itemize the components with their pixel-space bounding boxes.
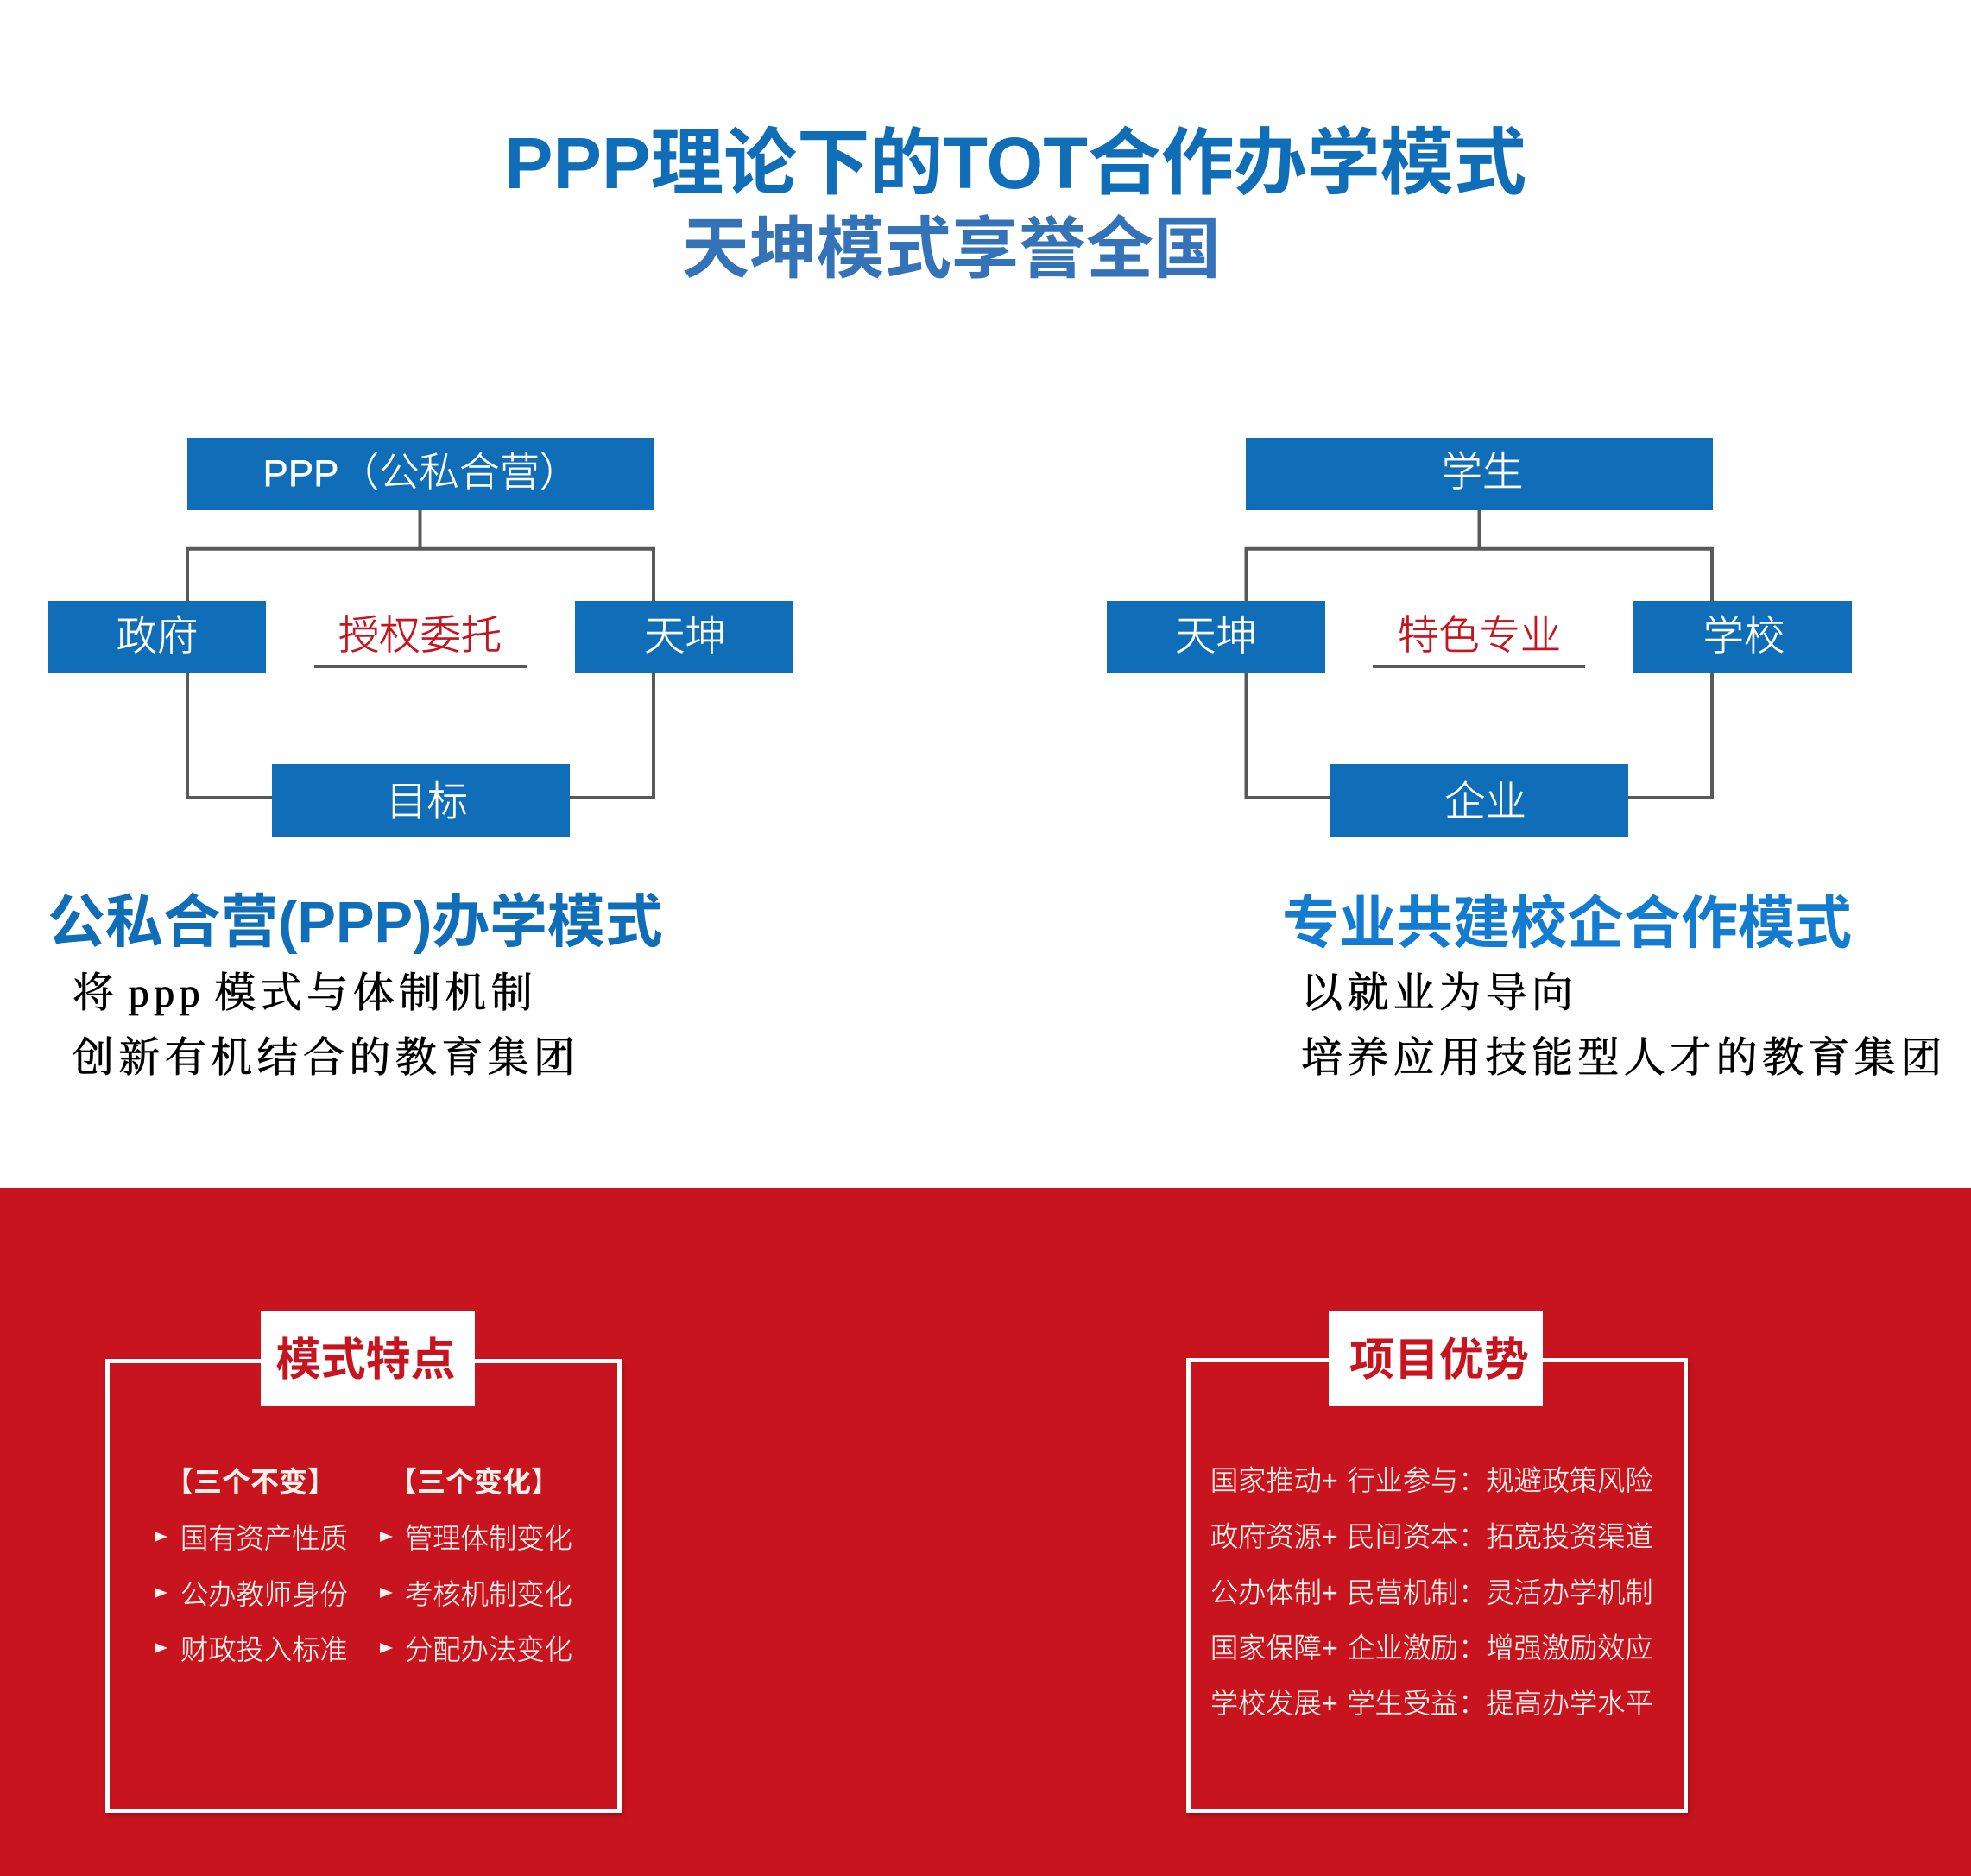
box: 天坤 — [1107, 601, 1325, 673]
bullet 2 — [155, 1588, 167, 1598]
label: 授权委托: 授权委托 — [338, 613, 502, 659]
list: changed — [380, 1523, 572, 1665]
box: 政府 — [48, 601, 266, 673]
title line 2: 天坤模式享誉全国 — [682, 211, 1221, 287]
text block: PPP model — [47, 891, 663, 1081]
tag: 项目优势 — [1329, 1311, 1543, 1406]
connector lines — [1245, 510, 1714, 799]
panel: 模式特点 — [105, 1311, 625, 1818]
box: 学生: 学生 — [1442, 450, 1523, 496]
box: 目标: 目标 — [386, 780, 468, 825]
box: 天坤 — [575, 601, 793, 673]
box: PPP — [187, 438, 654, 510]
column heading: 三个变化: 【三个变化】 — [389, 1466, 559, 1498]
bullet 1 — [155, 1532, 167, 1542]
description line 1: 将 ppp 模式与体制机制 — [73, 970, 537, 1016]
list: unchanged — [155, 1523, 348, 1665]
bullet 1 — [380, 1532, 393, 1542]
description line 2: 培养应用技能型人才的教育集团 — [1301, 1035, 1947, 1081]
connector lines — [186, 510, 655, 799]
advantage row 5: 学校发展+ 学生受益：提高办学水平 — [1210, 1688, 1653, 1719]
item 1: 国有资产性质 — [180, 1523, 348, 1554]
box: 学校: 学校 — [1703, 614, 1785, 660]
panel: red background — [0, 1188, 1971, 1876]
bullet 2 — [380, 1588, 393, 1598]
title — [504, 122, 1526, 287]
box: 天坤: 天坤 — [1175, 614, 1257, 660]
heading: 专业共建校企合作模式 — [1282, 891, 1852, 955]
tag: 模式特点: 模式特点 — [275, 1336, 456, 1386]
bullet 3 — [380, 1643, 393, 1653]
title line 1: PPP理论下的TOT合作办学模式 — [504, 122, 1526, 204]
text block: school-enterprise model — [1282, 891, 1947, 1081]
box: 企业: 企业 — [1444, 780, 1526, 825]
panel: school-enterprise diagram — [1107, 438, 1852, 837]
advantage row 4: 国家保障+ 企业激励：增强激励效应 — [1210, 1633, 1653, 1664]
underline — [1373, 665, 1585, 668]
item 1: 管理体制变化 — [405, 1523, 572, 1554]
item 3: 财政投入标准 — [180, 1634, 348, 1665]
item 3: 分配办法变化 — [405, 1634, 572, 1665]
description line 1: 以就业为导向 — [1301, 970, 1577, 1016]
box: 学生 — [1246, 438, 1713, 510]
label: 特色专业: 特色专业 — [1398, 613, 1561, 659]
item 2: 公办教师身份 — [180, 1579, 348, 1610]
advantage row 1: 国家推动+ 行业参与：规避政策风险 — [1210, 1465, 1653, 1496]
frame — [1186, 1358, 1688, 1813]
box: 企业 — [1330, 764, 1628, 837]
underline — [314, 665, 527, 668]
box: 天坤: 天坤 — [644, 614, 726, 660]
tag: 项目优势: 项目优势 — [1349, 1336, 1529, 1386]
box: PPP: PPP（公私合营） — [262, 450, 580, 495]
column heading: 三个不变: 【三个不变】 — [165, 1466, 336, 1498]
panel: 项目优势 — [1186, 1311, 1692, 1818]
panel: PPP diagram — [48, 438, 793, 837]
bullet 3 — [155, 1643, 167, 1653]
item 2: 考核机制变化 — [405, 1579, 572, 1610]
heading: 公私合营(PPP)办学模式 — [47, 891, 663, 955]
box: 学校 — [1633, 601, 1852, 673]
description line 2: 创新有机结合的教育集团 — [73, 1035, 579, 1081]
advantage row 3: 公办体制+ 民营机制：灵活办学机制 — [1210, 1577, 1653, 1608]
box: 目标 — [272, 764, 570, 837]
frame — [105, 1359, 622, 1813]
tag: 模式特点 — [261, 1311, 475, 1406]
box: 政府: 政府 — [116, 614, 199, 660]
advantage row 2: 政府资源+ 民间资本：拓宽投资渠道 — [1210, 1521, 1653, 1552]
